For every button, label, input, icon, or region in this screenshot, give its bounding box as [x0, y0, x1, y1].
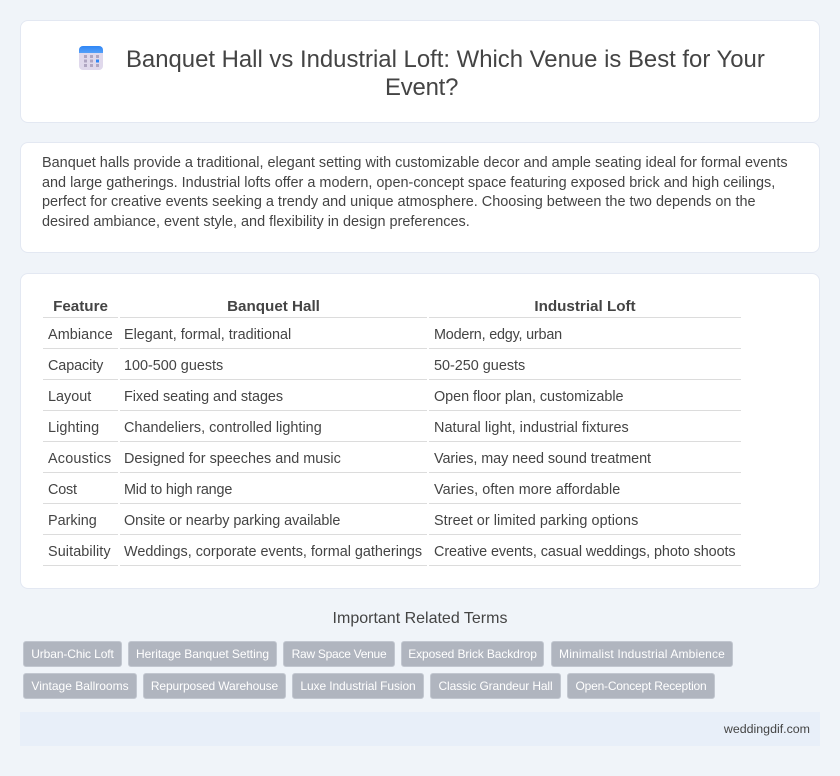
table rows: Fixed seating and stages [124, 389, 283, 405]
table rows: Designed for speeches and music [124, 451, 341, 467]
table rows: Onsite or nearby parking available [124, 513, 340, 529]
intro text: and large gatherings. Industrial lofts offer a modern, open-concept space featuring exposed brick and high ceilings, [42, 174, 775, 190]
table header: banquet hall: Banquet Hall [227, 298, 320, 315]
icon: calendar [79, 46, 103, 70]
intro text: Banquet halls provide a traditional, elegant setting with customizable decor and ample seating ideal for formal events [42, 155, 788, 171]
table rows: Chandeliers, controlled lighting [124, 420, 322, 436]
table rows: Layout [48, 389, 91, 405]
table rows: Ambiance [48, 327, 113, 343]
tags: Classic Grandeur Hall [438, 679, 552, 693]
comparison table panel [20, 273, 820, 589]
related terms heading: Important Related Terms [333, 610, 507, 626]
intro panel [20, 142, 820, 253]
table rows: Street or limited parking options [434, 513, 638, 529]
table rows: 100-500 guests [124, 358, 223, 374]
intro text: desired ambiance, event style, and flexibility in design preferences. [42, 214, 470, 230]
table rows: Creative events, casual weddings, photo shoots [434, 544, 736, 560]
tags: Raw Space Venue [292, 647, 386, 661]
tags: Minimalist Industrial Ambience [559, 647, 725, 661]
title: Banquet Hall vs Industrial Loft: Which Venue is Best for Your [126, 46, 765, 73]
footer source: weddingdif.com [724, 722, 810, 736]
title: Event? [385, 74, 458, 101]
table header: feature: Feature [53, 298, 108, 315]
table rows: Cost [48, 482, 77, 498]
table header: industrial loft: Industrial Loft [534, 298, 636, 315]
intro text [42, 155, 788, 230]
table rows: Open floor plan, customizable [434, 389, 624, 405]
tags: Luxe Industrial Fusion [300, 679, 416, 693]
table rows: Modern, edgy, urban [434, 327, 562, 343]
table rows: 50-250 guests [434, 358, 525, 374]
table rows: Acoustics [48, 451, 111, 467]
table rows: Natural light, industrial fixtures [434, 420, 629, 436]
table rows: Mid to high range [124, 482, 232, 498]
table rows: Parking [48, 513, 97, 529]
tags: Open-Concept Reception [575, 679, 707, 693]
tags: Repurposed Warehouse [151, 679, 278, 693]
intro text: perfect for creative events seeking a trendy and unique atmosphere. Choosing between the two depends on the [42, 194, 756, 210]
table rows: Varies, often more affordable [434, 482, 620, 498]
table rows [43, 317, 741, 566]
title [126, 46, 765, 101]
table rows: Suitability [48, 544, 111, 560]
table rows: Lighting [48, 420, 99, 436]
tags: Vintage Ballrooms [31, 679, 129, 693]
tags: Heritage Banquet Setting [136, 647, 269, 661]
footer bar [20, 712, 820, 746]
tags: Urban-Chic Loft [31, 647, 114, 661]
table rows: Varies, may need sound treatment [434, 451, 651, 467]
header panel [20, 20, 820, 123]
table rows: Elegant, formal, traditional [124, 327, 291, 343]
tags: Exposed Brick Backdrop [408, 647, 537, 661]
table rows: Capacity [48, 358, 103, 374]
table rows: Weddings, corporate events, formal gatherings [124, 544, 422, 560]
